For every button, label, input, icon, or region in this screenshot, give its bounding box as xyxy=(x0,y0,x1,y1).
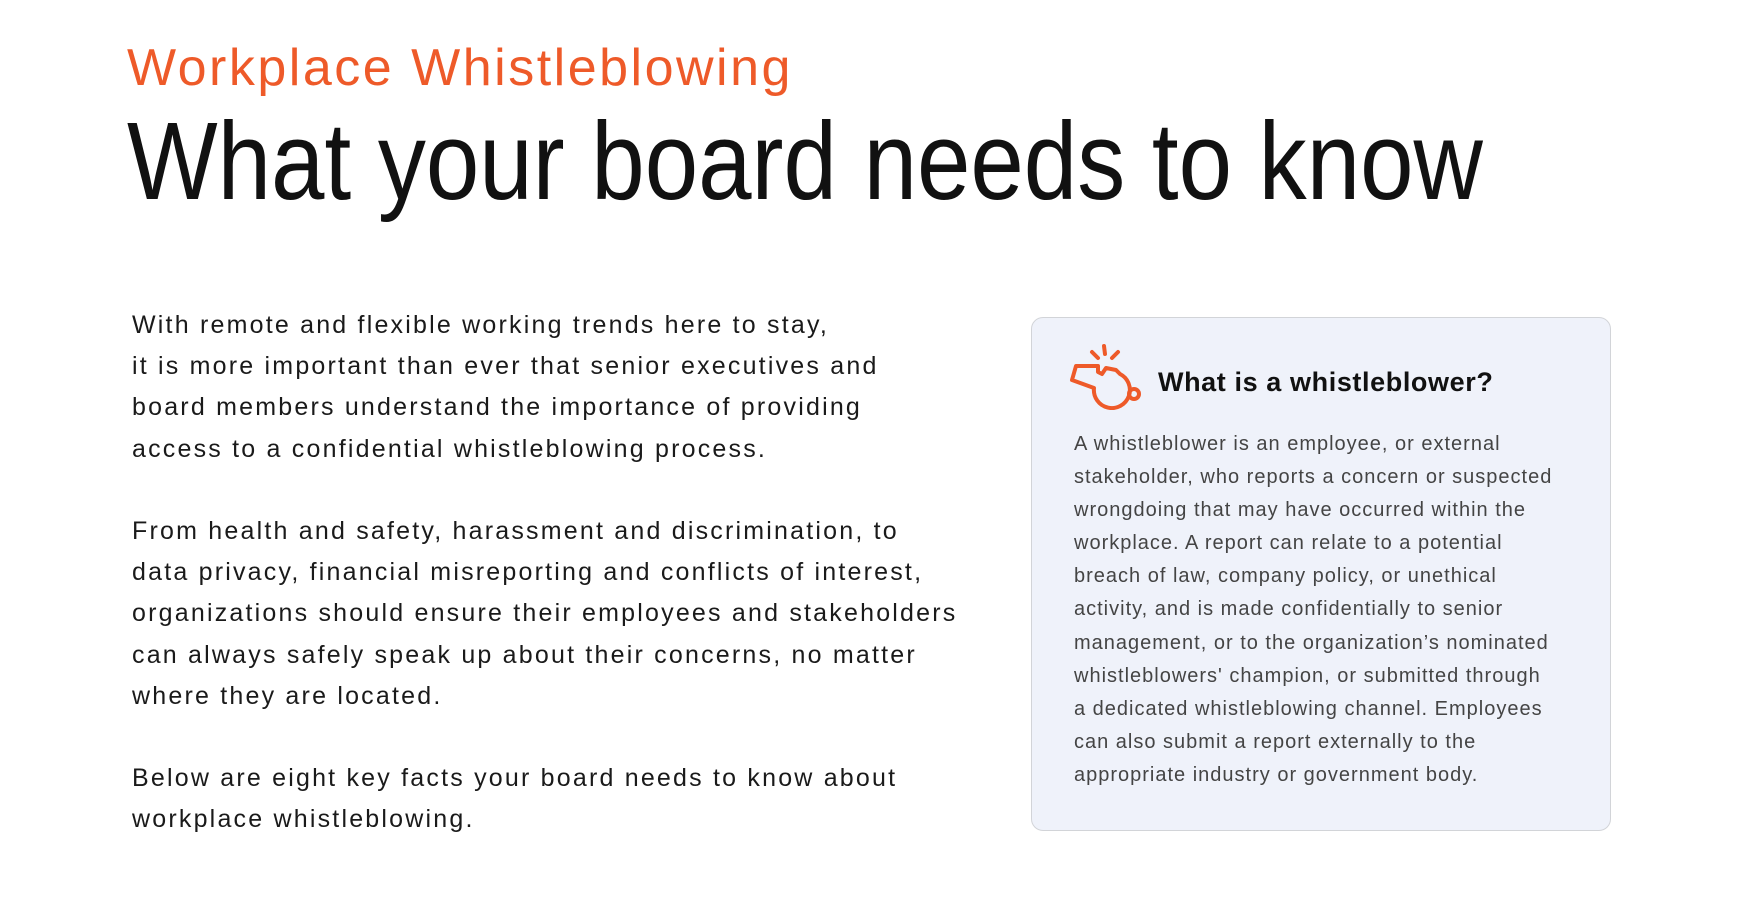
kicker title: Workplace Whistleblowing xyxy=(127,39,793,97)
intro text: it is more important than ever that senior executives and xyxy=(132,352,879,380)
panel heading: What is a whistleblower? xyxy=(1158,367,1493,397)
panel body text: a dedicated whistleblowing channel. Employees xyxy=(1074,698,1543,720)
intro text: access to a confidential whistleblowing process. xyxy=(132,435,767,463)
panel body text: activity, and is made confidentially to senior xyxy=(1074,598,1503,620)
panel body text: can also submit a report externally to the xyxy=(1074,731,1476,753)
panel body text xyxy=(1074,433,1552,786)
panel body text: whistleblowers' champion, or submitted through xyxy=(1074,665,1541,687)
panel body text: stakeholder, who reports a concern or suspected xyxy=(1074,466,1552,488)
panel body text: breach of law, company policy, or unethical xyxy=(1074,565,1497,587)
intro text: data privacy, financial misreporting and conflicts of interest, xyxy=(132,558,923,586)
intro text: Below are eight key facts your board needs to know about xyxy=(132,764,897,792)
intro text: can always safely speak up about their concerns, no matter xyxy=(132,641,917,669)
panel: what is a whistleblower xyxy=(1031,317,1611,831)
intro text: workplace whistleblowing. xyxy=(132,805,475,833)
panel body text: A whistleblower is an employee, or external xyxy=(1074,433,1501,455)
icon: whistle xyxy=(1070,344,1141,410)
panel body text: management, or to the organization’s nominated xyxy=(1074,632,1549,654)
intro text: where they are located. xyxy=(132,682,442,710)
panel body text: workplace. A report can relate to a potential xyxy=(1074,532,1503,554)
panel body text: appropriate industry or government body. xyxy=(1074,764,1478,786)
panel body text: wrongdoing that may have occurred within the xyxy=(1074,499,1526,521)
intro text: board members understand the importance of providing xyxy=(132,393,862,421)
intro text: organizations should ensure their employees and stakeholders xyxy=(132,599,957,627)
intro text xyxy=(132,311,957,833)
intro text: From health and safety, harassment and discrimination, to xyxy=(132,517,899,545)
main heading: What your board needs to know xyxy=(127,100,1483,223)
intro text: With remote and flexible working trends here to stay, xyxy=(132,311,829,339)
